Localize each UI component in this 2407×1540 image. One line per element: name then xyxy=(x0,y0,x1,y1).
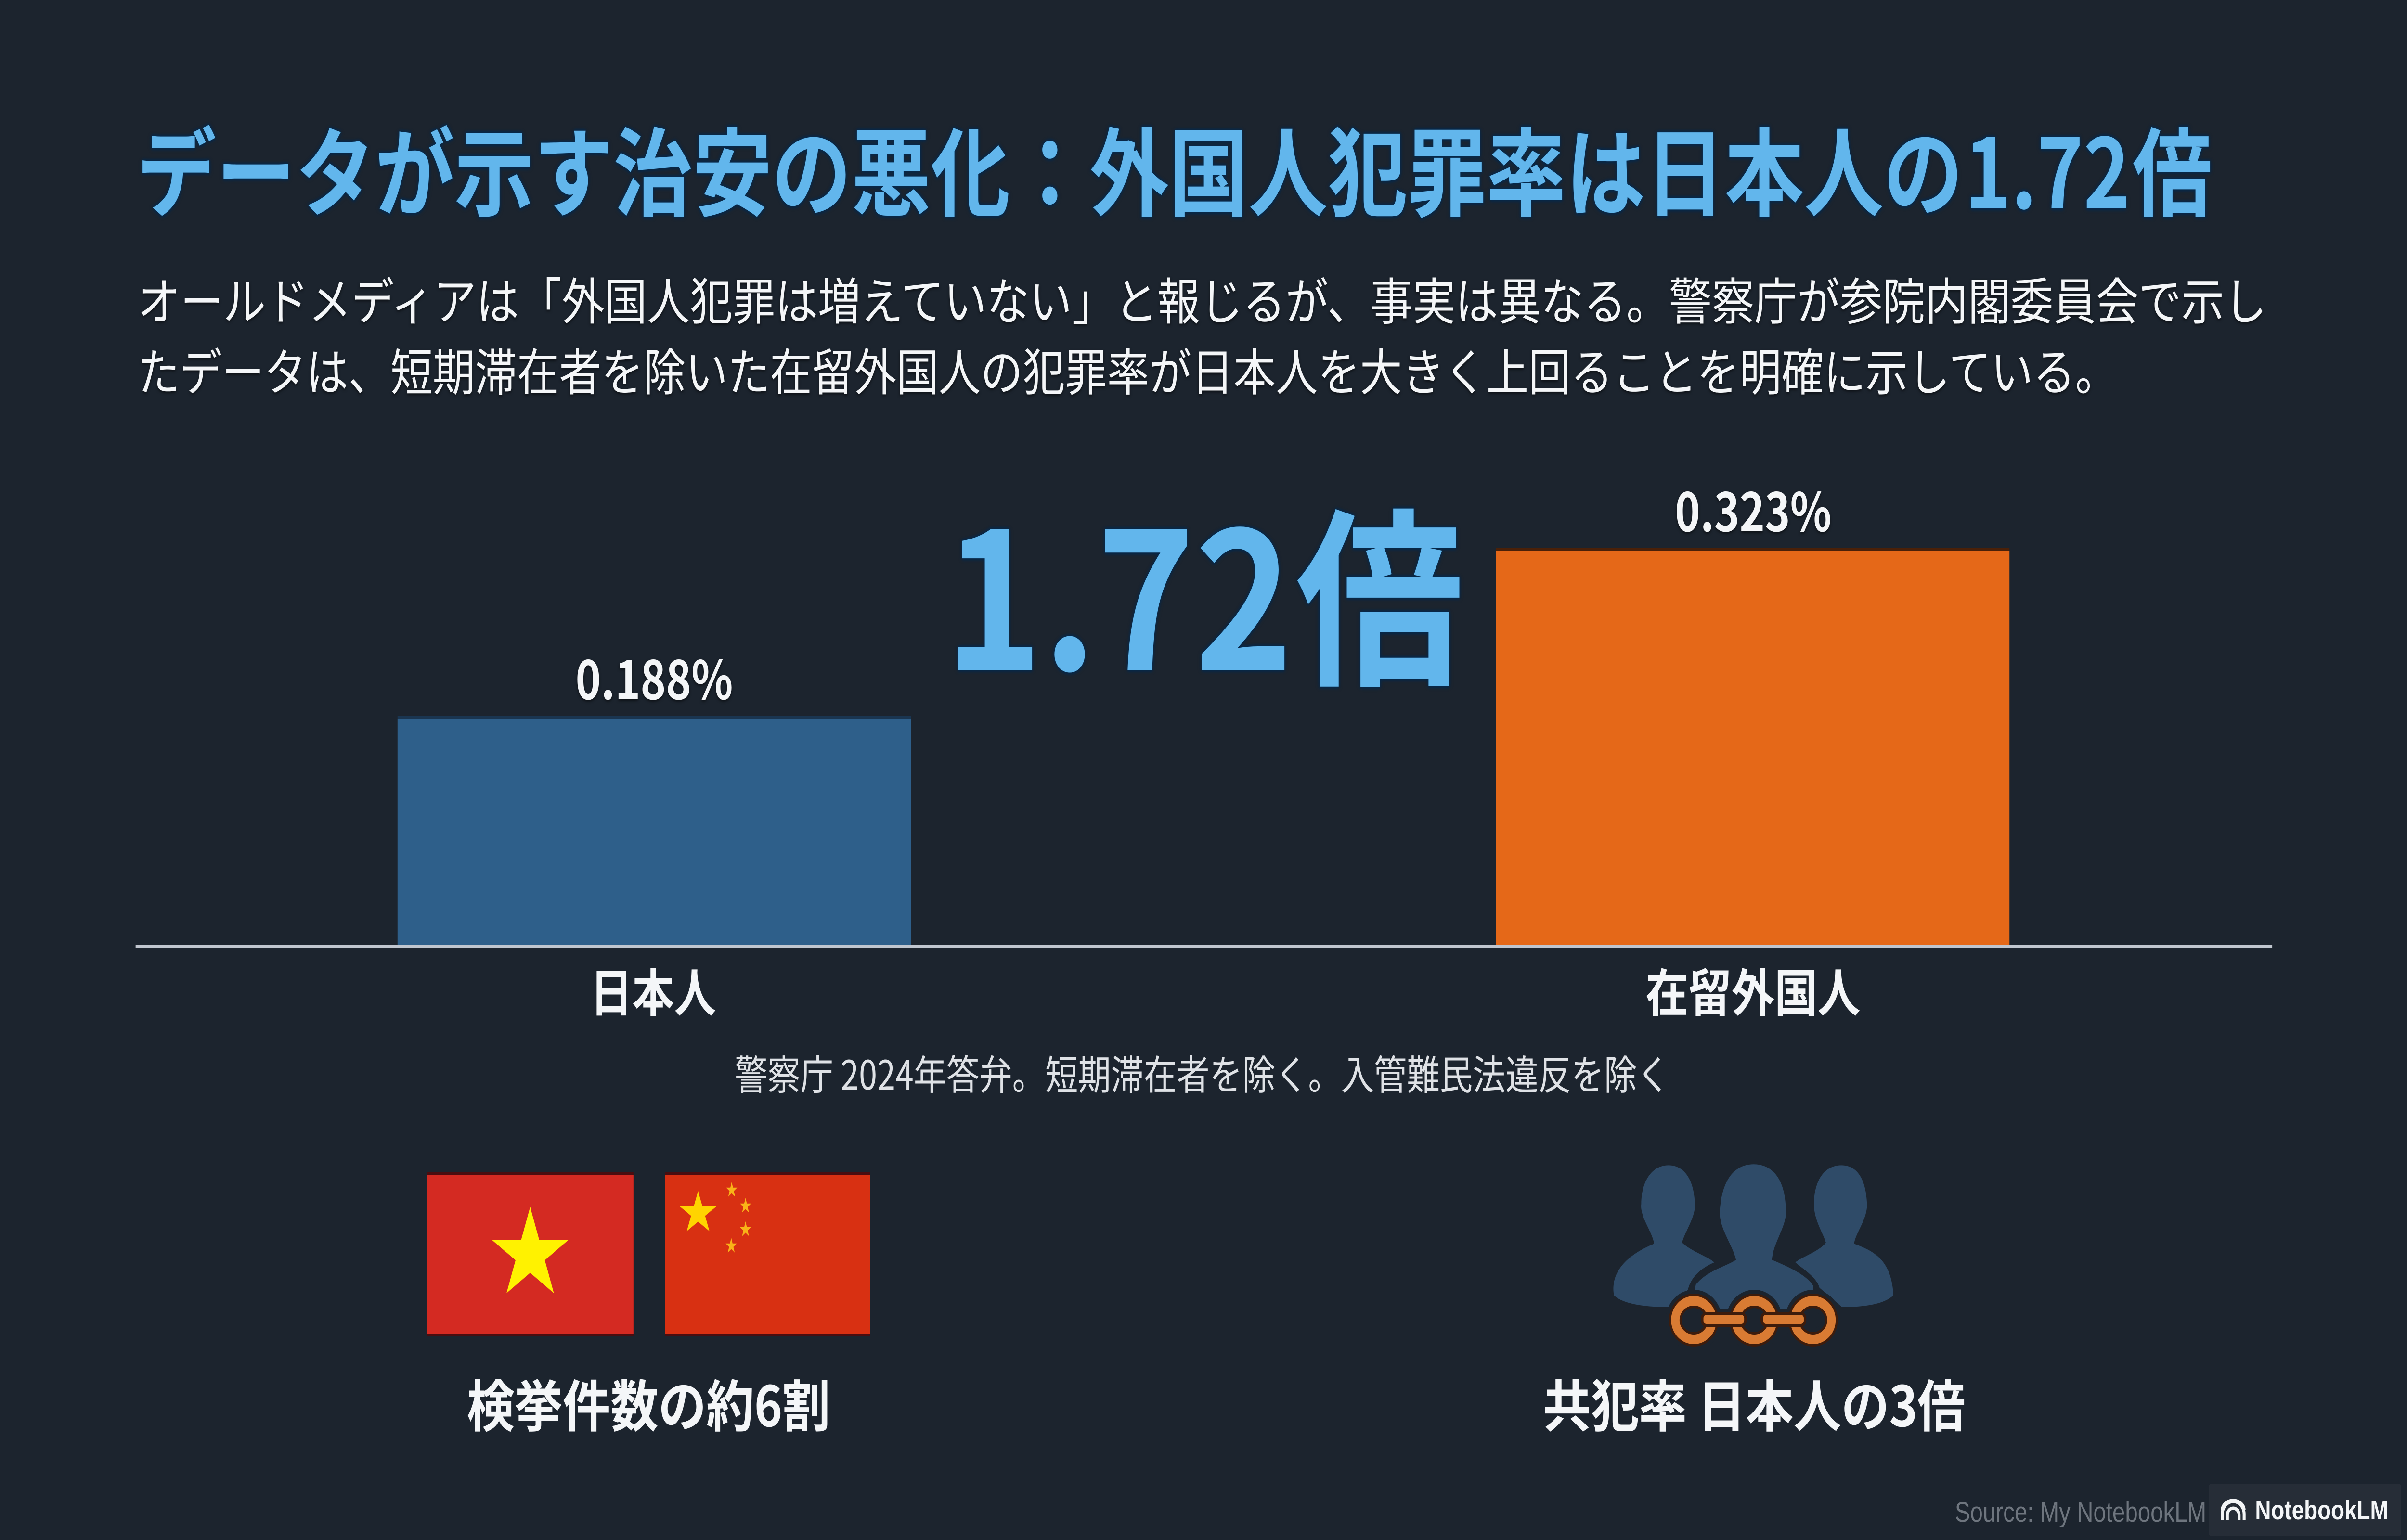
label: 共犯率 日本人の3倍: 共犯率 日本人の3倍 xyxy=(1543,1362,1966,1443)
intro text block xyxy=(138,262,2267,405)
badge wordmark: NotebookLM xyxy=(2255,1495,2389,1526)
intro text block: オールドメディアは「外国人犯罪は増えていない」と報じるが、事実は異なる。警察庁が参院内閣委員会で示し xyxy=(138,262,2267,334)
category label: 日本人: 日本人 xyxy=(590,952,716,1027)
title: データが示す治安の悪化：外国人犯罪率は日本人の xyxy=(137,97,1963,237)
icon: three people chained xyxy=(1613,1164,1893,1339)
icon: NotebookLM logo xyxy=(2222,1501,2244,1520)
people silhouettes xyxy=(1613,1164,1893,1309)
bar chart xyxy=(136,470,2272,1027)
source note: Source: My NotebookLM xyxy=(1955,1497,2206,1528)
big multiplier callout: 1.72 xyxy=(945,449,1293,725)
bar: Japanese xyxy=(398,716,911,946)
footnote: 警察庁 2024年答弁。短期滞在者を除く。入管難民法違反を除く xyxy=(735,1043,1670,1102)
title: 倍 xyxy=(2133,97,2212,237)
category label: 在留外国人: 在留外国人 xyxy=(1645,952,1861,1027)
value label: 0.188%: 0.188% xyxy=(576,638,733,715)
icon: Vietnam flag xyxy=(427,1172,634,1336)
label: 検挙件数の約6割: 検挙件数の約6割 xyxy=(467,1362,830,1443)
bar: foreign residents xyxy=(1496,548,2009,946)
intro text block: たデータは、短期滞在者を除いた在留外国人の犯罪率が日本人を大きく上回ることを明確に示している。 xyxy=(138,333,2117,405)
big multiplier callout xyxy=(945,449,1464,725)
value label: 0.323%: 0.323% xyxy=(1675,470,1831,547)
icon: China flag xyxy=(665,1172,870,1336)
axis line xyxy=(136,945,2272,948)
chain links xyxy=(1675,1301,1831,1339)
title: 1.72 xyxy=(1965,97,2130,237)
big multiplier callout: 倍 xyxy=(1296,449,1464,725)
NotebookLM badge xyxy=(2209,1484,2401,1536)
